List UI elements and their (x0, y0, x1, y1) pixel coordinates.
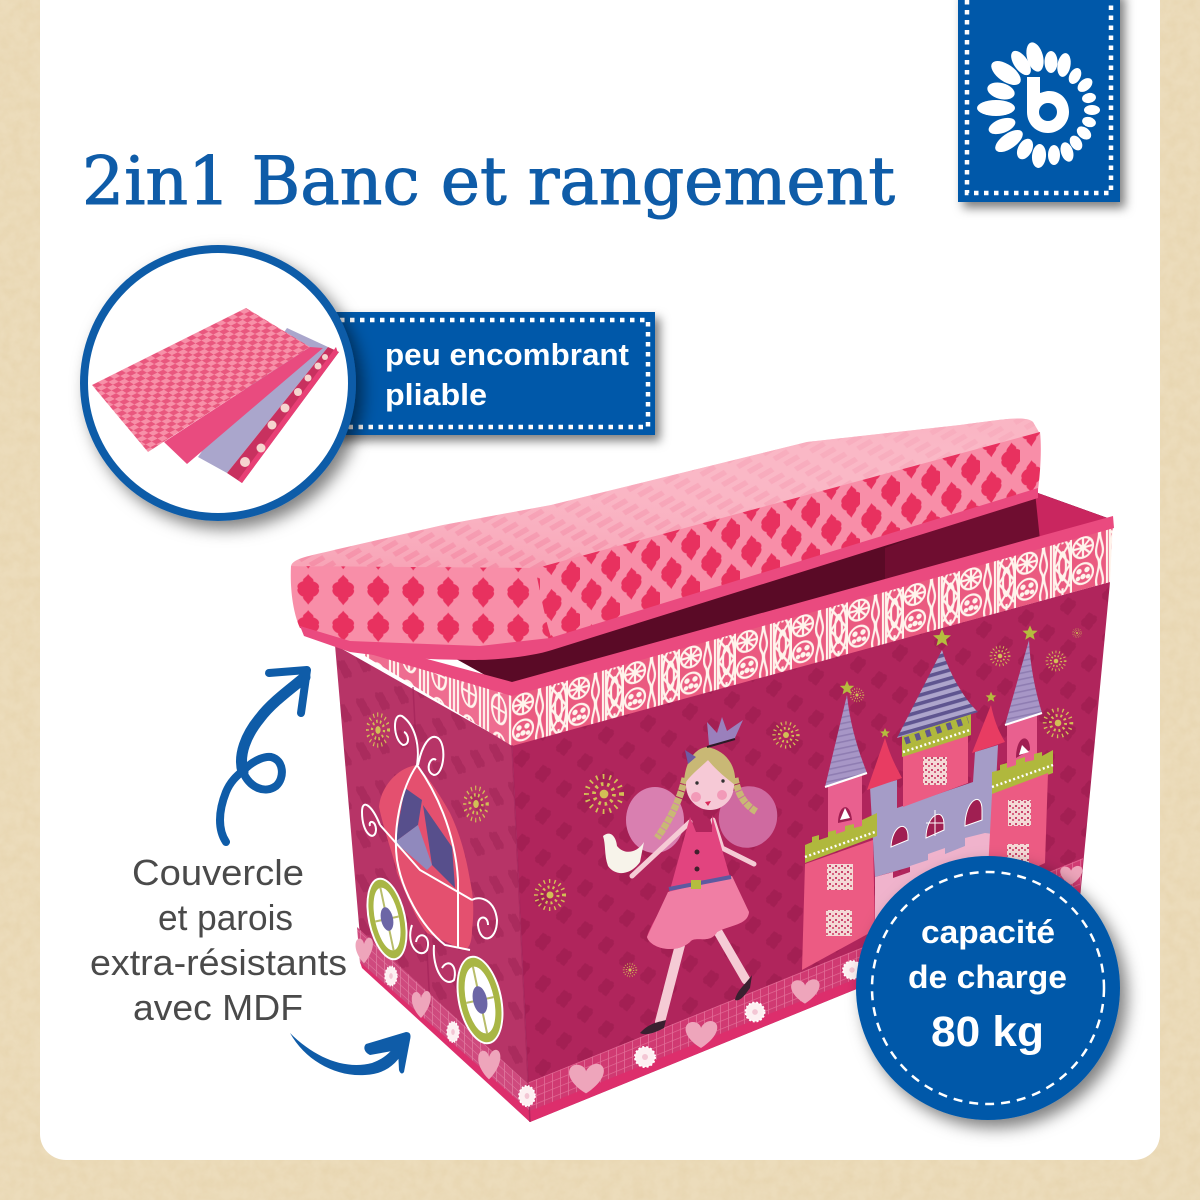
badge: capacité de charge 80 kg: 80 kg (931, 1008, 1044, 1056)
bottom band: side (357, 927, 530, 1122)
arrow: to side wall (290, 1032, 411, 1075)
carriage wheel: front (449, 951, 511, 1049)
decorative strip: front (512, 522, 1113, 746)
text block: couvercle et parois: et parois (158, 897, 293, 938)
box front panel (512, 582, 1110, 1122)
castle red roofs (867, 705, 1005, 790)
badge: capacité de charge 80 kg: capacité (921, 914, 1055, 950)
badge: capacité de charge 80 kg (856, 856, 1120, 1120)
logo tag (958, 0, 1120, 202)
sparkles and motifs (356, 629, 1082, 1106)
lid: bottom binding (300, 488, 1038, 660)
box left side panel (335, 645, 530, 1122)
title: 2in1 Banc et rangement (82, 143, 895, 220)
box rim (370, 516, 1114, 696)
text block: couvercle et parois: extra-résistants (90, 942, 347, 983)
bottom edge (360, 888, 1080, 1122)
circle inset: folded box (84, 249, 352, 517)
label: peu encombrant, pliable: pliable (385, 377, 487, 412)
fairy braids (657, 778, 757, 838)
folded product view (84, 249, 655, 517)
fairy head and hair (686, 760, 734, 810)
castle windows (891, 799, 982, 847)
box interior (440, 492, 1113, 690)
arrow: to lid (220, 670, 307, 842)
fairy dress (647, 815, 749, 949)
illustration: castle (802, 625, 1053, 970)
carriage wheel: rear (360, 874, 414, 964)
illustration: carriage (360, 716, 511, 1049)
illustration: fairy (603, 717, 786, 1034)
castle light base (875, 833, 993, 960)
castle main roof (897, 650, 978, 738)
castle centre keep (903, 733, 968, 807)
bottom band: front (527, 858, 1083, 1112)
lid: front long face (533, 432, 1041, 645)
decorative strip: side (365, 650, 512, 746)
castle grey wall (870, 745, 998, 877)
text block: couvercle et parois (90, 852, 347, 1028)
text block: couvercle et parois: avec MDF (133, 987, 303, 1028)
fairy crown (707, 717, 743, 745)
castle left tower (828, 775, 862, 845)
dove (603, 834, 644, 873)
product: foldable storage bench box (291, 419, 1114, 1122)
label: peu encombrant, pliable: peu encombrant (385, 337, 629, 372)
lid: short side face (291, 566, 552, 648)
badge: capacité de charge 80 kg: de charge (908, 959, 1067, 995)
icon: bubble flower logo (977, 40, 1100, 169)
text block: couvercle et parois: Couvercle (132, 852, 304, 893)
lid: top surface (291, 419, 1040, 570)
label: peu encombrant, pliable (330, 312, 655, 435)
fairy legs and arms (632, 820, 754, 1022)
castle right tower (1007, 713, 1037, 785)
